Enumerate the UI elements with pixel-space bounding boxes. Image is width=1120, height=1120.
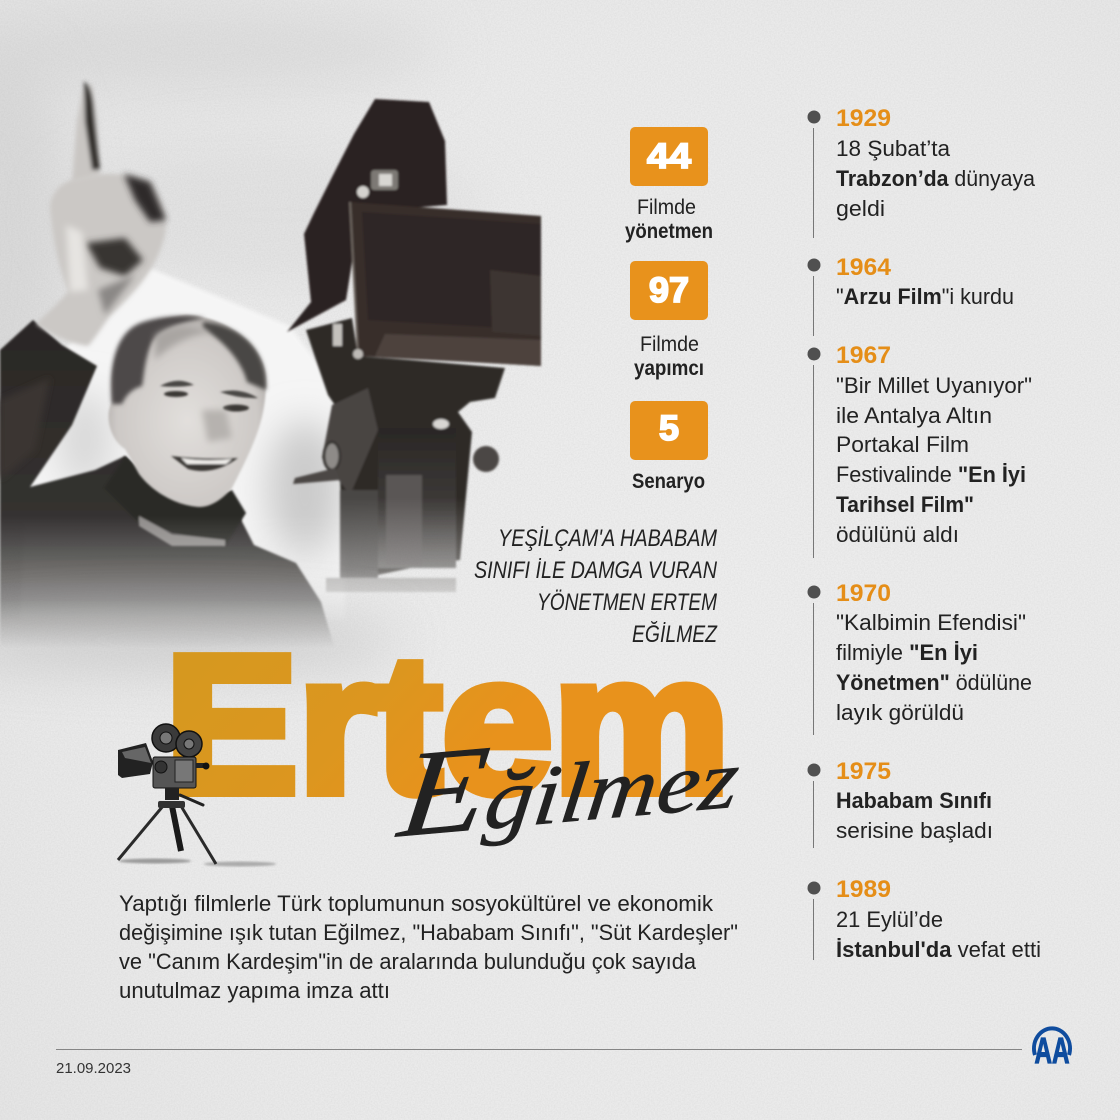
timeline: 1975 <box>808 758 993 848</box>
camera hood <box>287 99 447 332</box>
man figure <box>0 82 335 660</box>
timeline: 1967 <box>808 342 1032 558</box>
timeline: 1970: 1970 <box>836 580 891 607</box>
timeline: 1929: geldi <box>836 196 885 221</box>
raised finger <box>72 82 100 182</box>
nose and mouth <box>202 410 232 442</box>
timeline: 1970: layık görüldü <box>836 700 964 725</box>
tagline: YÖNETMEN ERTEM <box>537 589 717 616</box>
timeline: 1964: 1964 <box>836 254 892 281</box>
stat: 97 films produced: 97 <box>649 271 689 310</box>
body <box>153 757 196 788</box>
timeline: 1989: 1989 <box>836 876 891 903</box>
timeline: 1967: Festivalinde "En İyi <box>836 462 1026 487</box>
timeline: 1989: 21 Eylül’de <box>836 907 943 932</box>
timeline: 1975: Hababam Sınıfı <box>836 788 992 813</box>
icon: film camera on tripod <box>118 724 276 866</box>
description paragraph: değişimine ışık tutan Eğilmez, "Hababam Sınıfı", "Süt Kardeşler" <box>119 920 738 945</box>
matte box <box>118 743 153 778</box>
photo: Ertem Eğilmez with film camera <box>0 82 541 664</box>
description paragraph: unutulmaz yapıma imza attı <box>119 978 390 1003</box>
timeline <box>808 105 1041 962</box>
head <box>108 315 266 507</box>
timeline: 1967: ödülünü aldı <box>836 522 959 547</box>
description paragraph: ve "Canım Kardeşim"in de aralarında bulunduğu çok sayıda <box>119 949 697 974</box>
reels <box>152 724 180 752</box>
photo backdrop <box>32 270 340 599</box>
timeline: 1967: 1967 <box>836 342 891 369</box>
timeline: 1967: ile Antalya Altın <box>836 403 992 428</box>
description paragraph <box>119 891 738 1003</box>
sweater and arm <box>0 320 335 660</box>
timeline: 1970 <box>808 580 1032 735</box>
stat: 97 films produced: Filmde <box>640 333 699 356</box>
timeline: 1975: 1975 <box>836 758 891 785</box>
timeline: 1929: 1929 <box>836 105 891 132</box>
timeline: 1964 <box>808 254 1014 336</box>
hair <box>111 316 205 404</box>
stat: 5 screenplays: Senaryo <box>632 470 705 493</box>
timeline: 1929 <box>808 105 1036 238</box>
timeline: 1964: "Arzu Film"i kurdu <box>836 284 1014 309</box>
timeline: 1970: Yönetmen" ödülüne <box>836 670 1032 695</box>
tagline: SINIFI İLE DAMGA VURAN <box>474 557 718 584</box>
film camera <box>287 99 541 592</box>
bottom haze <box>0 616 400 664</box>
timeline: 1929: 18 Şubat’ta <box>836 136 951 161</box>
neck and collar <box>104 456 246 547</box>
fist <box>36 174 166 346</box>
stat: 5 screenplays <box>630 401 708 493</box>
tagline: YEŞİLÇAM'A HABABAM <box>498 525 717 552</box>
title: Ertem: Ertem <box>165 615 730 834</box>
timeline: 1967: Portakal Film <box>836 432 969 457</box>
tagline <box>474 525 718 648</box>
camera viewfinder <box>357 170 398 198</box>
timeline: 1975: serisine başladı <box>836 818 993 843</box>
timeline: 1970: filmiyle "En İyi <box>836 640 978 665</box>
timeline: 1967: Tarihsel Film" <box>836 492 974 517</box>
stat: 44 films directed: 44 <box>647 137 692 176</box>
timeline: 1989 <box>808 876 1041 962</box>
title: Eğilmez script: Eğilmez <box>391 696 749 864</box>
timeline: 1970: "Kalbimin Efendisi" <box>836 610 1026 635</box>
description paragraph: Yaptığı filmlerle Türk toplumunun sosyokültürel ve ekonomik <box>119 891 714 916</box>
stat: 97 films produced: yapımcı <box>634 357 704 380</box>
tagline: EĞİLMEZ <box>632 621 718 648</box>
timeline: 1989: İstanbul'da vefat etti <box>836 937 1041 962</box>
stat: 97 films produced <box>630 261 708 380</box>
stat: 44 films directed: Filmde <box>637 196 696 219</box>
eyes and brows <box>160 381 258 412</box>
date: 21.09.2023 <box>56 1061 131 1077</box>
tripod <box>165 788 179 800</box>
camera mechanism <box>306 318 505 582</box>
camera box <box>350 202 541 366</box>
stat: 5 screenplays: 5 <box>659 409 679 448</box>
stat: 44 films directed <box>625 127 713 243</box>
timeline: 1929: Trabzon’da dünyaya <box>836 166 1036 191</box>
icon: AA logo: AA <box>1034 1030 1070 1071</box>
timeline: 1967: "Bir Millet Uyanıyor" <box>836 373 1032 398</box>
stat: 44 films directed: yönetmen <box>625 220 713 243</box>
icon: AA logo <box>1034 1028 1070 1071</box>
